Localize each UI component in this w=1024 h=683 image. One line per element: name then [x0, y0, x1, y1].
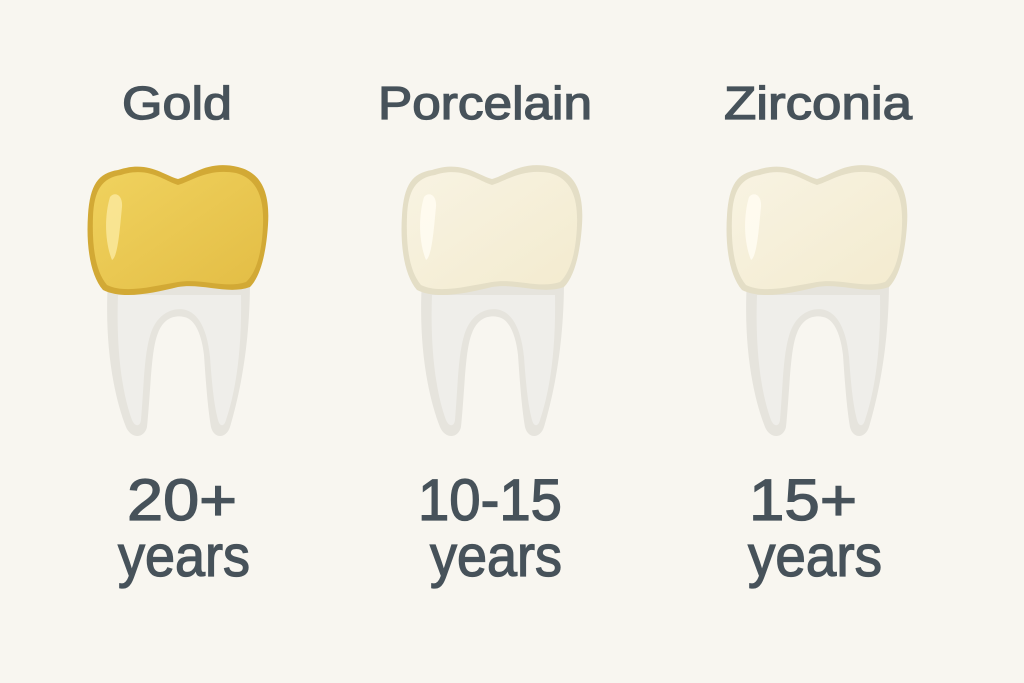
icon: zirconia tooth — [727, 165, 907, 436]
icon: porcelain tooth — [402, 165, 582, 436]
lifespan: zirconia: 15+ — [749, 468, 857, 533]
lifespan: porcelain: years — [430, 524, 562, 589]
title: Zirconia: Zirconia — [724, 77, 912, 129]
lifespan: gold — [118, 468, 250, 589]
lifespan: gold: 20+ — [127, 468, 237, 533]
lifespan: zirconia: years — [748, 524, 882, 589]
lifespan: porcelain: 10-15 — [418, 468, 562, 533]
title: Gold: Gold — [122, 77, 232, 129]
lifespan: porcelain — [418, 468, 562, 589]
title: Porcelain: Porcelain — [378, 77, 592, 129]
lifespan: gold: years — [118, 524, 250, 589]
icon: gold tooth — [88, 165, 268, 436]
lifespan: zirconia — [748, 468, 882, 589]
